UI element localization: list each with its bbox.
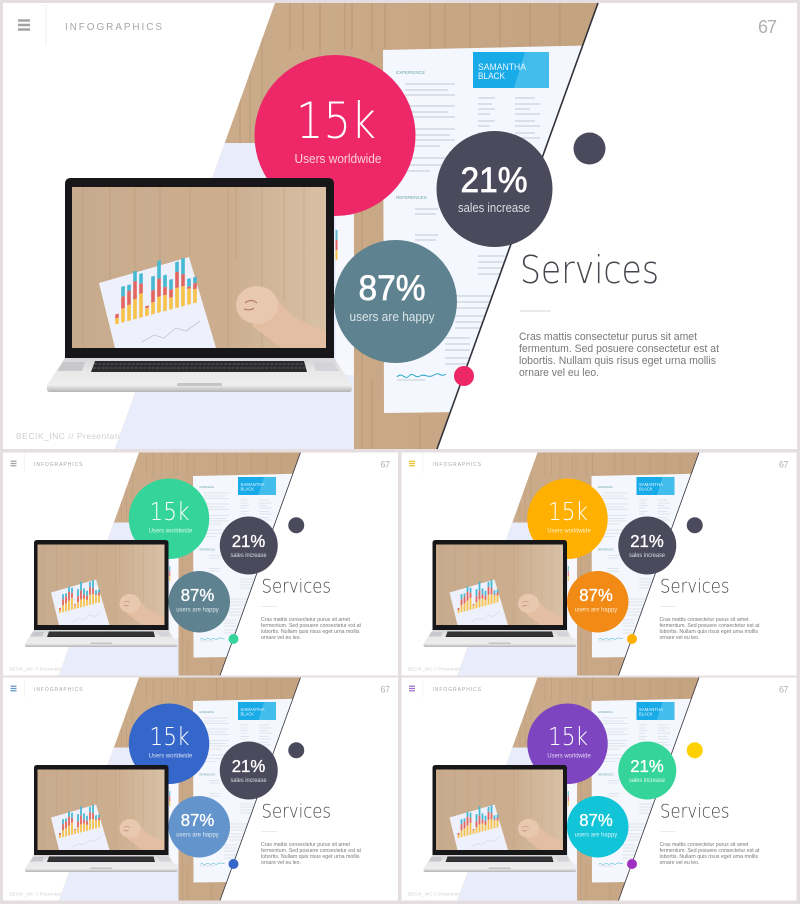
circle: 21%: sales increase [629, 552, 665, 559]
resume text: REFERENCES [200, 774, 215, 776]
circle: 15k [129, 478, 209, 559]
circle: 15k [527, 704, 608, 784]
icon: hamburger menu [10, 686, 16, 691]
footer text: BECIK_INC // Presentation [10, 666, 67, 672]
header divider [45, 5, 47, 44]
header title: INFOGRAPHICS [432, 462, 482, 468]
body text: ornare vel eu leo. [519, 367, 599, 379]
icon: hamburger menu [409, 461, 415, 466]
circle: 15k: 15k [150, 497, 190, 526]
heading: Services: Services [520, 248, 659, 292]
panel: small slide, green [3, 451, 398, 676]
diagonal line [618, 678, 699, 900]
resume text: REFERENCES [200, 550, 215, 552]
body text [660, 617, 760, 641]
diagonal line [220, 452, 300, 676]
body text: fermentum. Sed posuere consectetur est at [519, 343, 719, 355]
heading: Services: Services [262, 576, 331, 598]
body text [660, 842, 760, 866]
circle: 87% [334, 240, 457, 363]
rule [520, 310, 551, 312]
panel: main slide, pink [3, 0, 797, 450]
rule [660, 830, 676, 832]
laptop [47, 178, 352, 392]
header title: INFOGRAPHICS [34, 687, 83, 693]
panel: small slide, blue [3, 676, 398, 901]
body text: ornare vel eu leo. [660, 635, 700, 641]
circle: 21%: 21% [460, 161, 528, 200]
laptop [424, 540, 576, 647]
resume text: SAMANTHA [478, 62, 527, 73]
circle: 87%: users are happy [176, 832, 219, 838]
resume text: BLACK [240, 486, 255, 492]
dot: dark [288, 517, 304, 533]
rule [262, 606, 277, 608]
dot: accent [228, 634, 238, 644]
circle: 15k: 15k [548, 722, 588, 751]
heading: Services: Services [660, 576, 730, 598]
photo: wood desk and resume [100, 0, 610, 450]
resume text: BLACK [478, 71, 506, 82]
photo [52, 451, 306, 676]
resume text [200, 707, 265, 776]
circle: 87% [567, 571, 628, 632]
circle: 15k: Users worldwide [547, 528, 591, 534]
body text: lobortis. Nullam quis risus eget urna mollis [660, 854, 758, 860]
panel: small slide, orange [402, 451, 796, 676]
circle: 87% [168, 571, 230, 632]
circle: 87%: users are happy [575, 832, 618, 838]
dot: accent [228, 859, 238, 869]
circle: 21%: sales increase [230, 777, 267, 784]
body text: Cras mattis consectetur purus sit amet [261, 842, 350, 848]
page number: 67 [779, 684, 788, 694]
body text: lobortis. Nullam quis risus eget urna mollis [261, 854, 360, 860]
circle: 15k: 15k [296, 92, 376, 150]
circle: 21%: 21% [232, 531, 265, 551]
footer text: BECIK_INC // Presentation [408, 892, 466, 896]
header title: INFOGRAPHICS [432, 687, 482, 693]
resume text [396, 62, 527, 200]
body text: lobortis. Nullam quis risus eget urna mollis [261, 629, 360, 635]
page number: 67 [758, 17, 777, 37]
circle: 21% [220, 516, 278, 574]
footer text: BECIK_INC // Presentation [408, 666, 466, 672]
circle: 15k: Users worldwide [294, 152, 382, 166]
body text: Cras mattis consectetur purus sit amet [519, 331, 697, 343]
circle: 21%: sales increase [629, 777, 665, 784]
body text [261, 842, 361, 866]
body text: fermentum. Sed posuere consectetur est at [660, 623, 760, 629]
resume text: BLACK [639, 486, 653, 492]
circle: 21%: 21% [630, 531, 664, 551]
resume text: SAMANTHA [240, 707, 265, 713]
resume text: EXPERIENCE [598, 712, 613, 714]
circle: 21%: sales increase [230, 552, 267, 559]
diagonal line [437, 3, 598, 449]
circle: 21%: 21% [232, 756, 265, 776]
body text: Cras mattis consectetur purus sit amet [660, 842, 749, 848]
circle: 15k [129, 704, 209, 784]
heading: Services: Services [660, 800, 730, 822]
diagonal line [618, 452, 699, 676]
resume text [598, 707, 664, 776]
resume text: BLACK [639, 712, 653, 718]
panel: small slide, purple [402, 676, 796, 901]
resume text: REFERENCES [598, 550, 614, 552]
photo [450, 676, 705, 901]
page number: 67 [380, 460, 390, 470]
resume text: REFERENCES [598, 774, 614, 776]
circle: 15k [254, 55, 416, 216]
body text [519, 331, 719, 379]
dot: dark [687, 517, 703, 533]
resume text: REFERENCES [396, 195, 427, 200]
circle: 21% [618, 516, 676, 574]
circle: 15k: 15k [150, 722, 190, 751]
body text: lobortis. Nullam quis risus eget urna mollis [519, 355, 716, 367]
header divider [422, 678, 424, 698]
diagonal line [220, 678, 300, 900]
circle: 87% [168, 796, 230, 858]
resume text: SAMANTHA [639, 482, 664, 488]
circle: 15k: Users worldwide [547, 752, 591, 760]
body text [261, 617, 361, 641]
body text: Cras mattis consectetur purus sit amet [660, 617, 749, 623]
resume text: EXPERIENCE [598, 487, 613, 489]
page number: 67 [380, 684, 390, 694]
icon: hamburger menu [10, 461, 16, 466]
body text: lobortis. Nullam quis risus eget urna mollis [660, 629, 758, 635]
circle: 21% [436, 131, 552, 247]
icon: hamburger menu [18, 20, 30, 30]
resume text: SAMANTHA [639, 707, 664, 713]
dot: accent [627, 859, 637, 869]
rule [262, 830, 277, 832]
header divider [24, 454, 26, 473]
circle: 21%: sales increase [458, 201, 530, 215]
body text: ornare vel eu leo. [660, 860, 700, 866]
dot: accent [627, 634, 637, 644]
circle: 87%: 87% [181, 585, 214, 605]
dot: dark [574, 132, 606, 164]
body text: fermentum. Sed posuere consectetur est at [261, 623, 361, 629]
footer text: BECIK_INC // Presentation [10, 892, 67, 896]
circle: 15k: Users worldwide [149, 528, 193, 534]
laptop [25, 765, 178, 872]
circle: 21% [220, 742, 278, 800]
circle: 87%: 87% [579, 585, 613, 605]
photo [52, 676, 306, 901]
body text: fermentum. Sed posuere consectetur est at [261, 848, 361, 854]
photo [450, 451, 705, 676]
header title: INFOGRAPHICS [65, 22, 162, 33]
body text: fermentum. Sed posuere consectetur est at [660, 848, 760, 854]
dot: accent [454, 366, 474, 386]
circle: 87%: 87% [358, 269, 426, 308]
icon: hamburger menu [409, 686, 415, 691]
body text: Cras mattis consectetur purus sit amet [261, 617, 350, 623]
resume text: EXPERIENCE [200, 712, 215, 714]
circle: 21% [618, 742, 676, 800]
dot: dark [288, 742, 304, 758]
circle: 87% [567, 796, 628, 858]
circle: 15k [527, 478, 608, 559]
laptop [424, 765, 576, 872]
circle: 87%: users are happy [575, 606, 618, 614]
resume text: BLACK [240, 712, 255, 718]
header title: INFOGRAPHICS [34, 462, 83, 468]
circle: 15k: 15k [548, 497, 588, 526]
circle: 87%: 87% [579, 810, 613, 830]
header divider [422, 454, 424, 473]
circle: 87%: 87% [181, 810, 214, 830]
rule [660, 606, 676, 608]
header divider [24, 678, 26, 698]
circle: 15k: Users worldwide [149, 752, 193, 760]
body text: ornare vel eu leo. [261, 860, 301, 866]
circle: 21%: 21% [630, 756, 664, 776]
circle: 87%: users are happy [350, 309, 435, 324]
circle: 87%: users are happy [176, 606, 219, 614]
resume text [598, 482, 664, 552]
heading: Services: Services [262, 800, 331, 822]
resume text: EXPERIENCE [200, 487, 215, 489]
page number: 67 [779, 460, 788, 470]
footer text: BECIK_INC // Presentation [16, 431, 131, 441]
resume text [200, 482, 265, 552]
resume text: SAMANTHA [240, 482, 265, 488]
laptop [25, 540, 178, 647]
dot: yellow [687, 742, 703, 758]
resume text: EXPERIENCE [396, 70, 425, 75]
body text: ornare vel eu leo. [261, 635, 301, 641]
